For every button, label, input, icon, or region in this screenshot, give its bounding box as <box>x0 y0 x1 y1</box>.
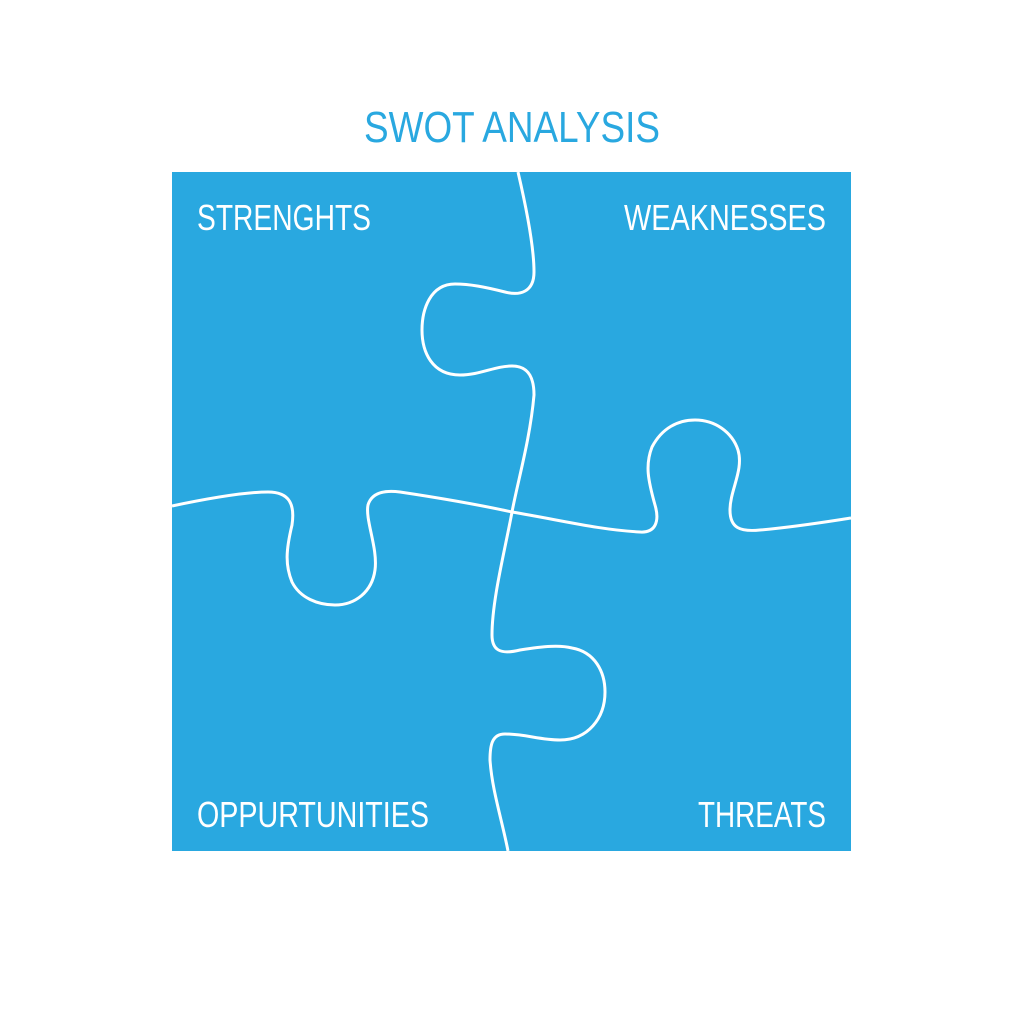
label: weaknesses: WEAKNESSES <box>624 197 826 238</box>
label: opportunities: OPPURTUNITIES <box>197 794 429 835</box>
title: SWOT ANALYSIS <box>364 103 660 152</box>
puzzle square <box>172 172 851 851</box>
vertical puzzle line <box>422 172 605 851</box>
label: strengths: STRENGHTS <box>197 197 371 238</box>
label: threats: THREATS <box>698 794 826 835</box>
horizontal puzzle line <box>172 420 851 605</box>
